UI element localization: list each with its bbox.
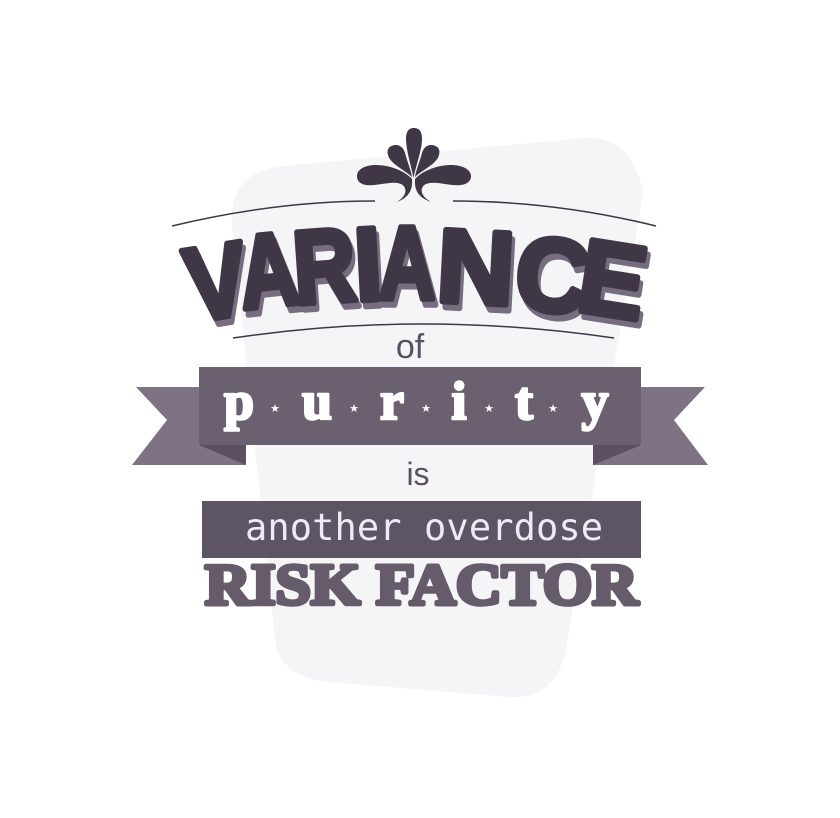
title: VARIANCE: E: [571, 218, 654, 342]
ribbon stars: [270, 402, 558, 415]
ribbon text: u: [302, 371, 332, 431]
title: VARIANCE: I: [351, 206, 385, 323]
word: of: of: [396, 328, 425, 366]
ribbon band: [199, 367, 641, 445]
title: VARIANCE: V: [177, 219, 256, 344]
ribbon text: t: [515, 371, 533, 431]
title: VARIANCE: N: [434, 208, 518, 328]
banner: another overdose: another overdose: [245, 506, 603, 549]
ribbon stars: ★: [349, 402, 359, 415]
ribbon text: i: [451, 371, 467, 431]
title: VARIANCE: R: [289, 206, 360, 327]
banner: another overdose: [202, 501, 641, 558]
icon: ornament: [357, 128, 471, 202]
ribbon stars: ★: [421, 402, 431, 415]
ribbon stars: ★: [548, 402, 558, 415]
ribbon left fold: [199, 445, 246, 465]
ribbon text: [224, 371, 608, 431]
lower arc line: [233, 324, 614, 338]
ribbon text: r: [380, 371, 404, 431]
title: VARIANCE: A: [379, 206, 435, 322]
title: VARIANCE: A: [233, 210, 303, 331]
title: VARIANCE: C: [510, 214, 595, 337]
word: is: is: [406, 456, 430, 492]
top arc lines: [172, 201, 656, 226]
ribbon stars: ★: [484, 402, 494, 415]
ribbon: purity: [132, 367, 708, 465]
title: VARIANCE: [177, 206, 654, 344]
ribbon left tail: [132, 387, 246, 465]
ribbon text: y: [582, 371, 608, 431]
ribbon right fold: [593, 445, 641, 465]
ribbon stars: ★: [270, 402, 280, 415]
heading: RISK FACTOR: RISK FACTOR: [205, 552, 639, 617]
background blob: [232, 138, 643, 697]
ribbon text: p: [224, 371, 254, 431]
ribbon right tail: [593, 387, 708, 465]
